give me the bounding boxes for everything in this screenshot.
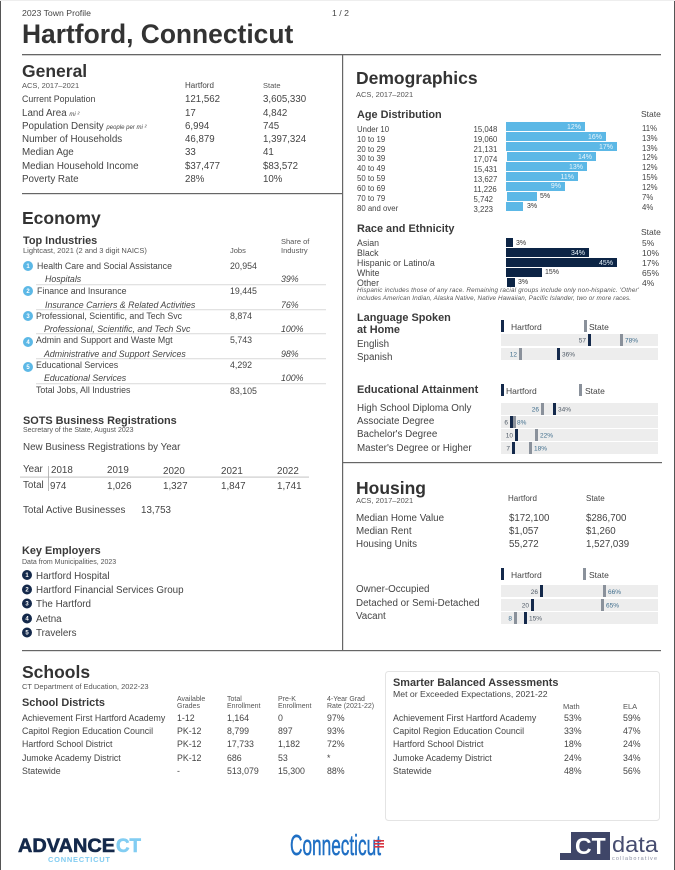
chart: language spoken at home: [357, 312, 658, 363]
chart: race and ethnicity: Other: [357, 278, 379, 288]
table: school districts: 17,733: [227, 739, 254, 749]
list: key employers: [22, 545, 184, 639]
chart: age distribution: 70 to 79: [357, 194, 385, 203]
card: smarter balanced assessments: ELA: [623, 702, 637, 711]
table: SOTS business registrations: 1,026: [107, 481, 132, 492]
list: key employers: Aetna: [36, 614, 62, 625]
panel: housing: [356, 478, 658, 624]
table: school districts: Pre-K: [278, 696, 296, 703]
table: top industries: 3: [26, 314, 30, 320]
table: housing statistics: State: [586, 494, 605, 503]
chart: age distribution: 7%: [642, 193, 653, 202]
chart: age distribution: 13%: [569, 164, 583, 171]
table: school districts: Rate (2021-22): [327, 703, 374, 710]
table: SOTS business registrations: New Business Registrations by Year: [23, 442, 181, 453]
table: SOTS business registrations: Total: [23, 480, 44, 491]
chart: housing occupancy: 26: [531, 589, 538, 596]
table: general statistics: $37,477: [185, 161, 220, 172]
table: SOTS business registrations: 2021: [221, 466, 243, 477]
chart: language spoken at home: State: [589, 322, 609, 332]
chart: age distribution: 60 to 69: [357, 184, 385, 193]
table: general statistics: 17: [185, 108, 196, 119]
logo: CT data collaborative: collaborative: [612, 856, 657, 862]
chart: race and ethnicity: State: [641, 227, 661, 237]
chart: age distribution: 20 to 29: [357, 145, 385, 154]
table: top industries: 5,743: [230, 335, 252, 345]
chart: housing occupancy: Detached or Semi-Detached: [356, 598, 480, 609]
chart: housing occupancy: 8: [508, 616, 512, 622]
chart: race and ethnicity: Black: [357, 248, 379, 258]
chart: housing occupancy: 20: [522, 602, 529, 610]
logo: AdvanceCT: CONNECTICUT: [48, 855, 110, 864]
table: top industries: Share of: [281, 237, 310, 246]
table: school districts: 88%: [327, 766, 345, 776]
list: key employers: 3: [25, 602, 29, 608]
chart: age distribution: 50 to 59: [357, 174, 385, 183]
heading: schools: Schools: [22, 662, 90, 682]
footnote: race and ethnicity: [357, 287, 640, 302]
chart: age distribution: 15,431: [474, 165, 497, 174]
table: SOTS business registrations: [20, 415, 309, 516]
footnote: race and ethnicity: includes American Indian, Alaska Native, Native Hawaiian, Pacific Islander, two or more races.: [357, 295, 631, 302]
table: housing statistics: $172,100: [509, 513, 550, 524]
chart: race and ethnicity: 15%: [545, 269, 559, 276]
table: general statistics: Median Household Income: [22, 161, 139, 172]
table: top industries: Lightcast, 2021 (2 and 3 digit NAICS): [23, 246, 147, 255]
chart: age distribution: 15%: [642, 173, 658, 182]
card: smarter balanced assessments: Statewide: [393, 766, 432, 776]
chart: race and ethnicity: 5%: [642, 238, 655, 248]
card: smarter balanced assessments: Met or Exceeded Expectations, 2021-22: [393, 689, 548, 699]
heading: economy: Economy: [22, 208, 101, 228]
chart: housing occupancy: Owner-Occupied: [356, 584, 430, 595]
chart: age distribution: 3,223: [474, 205, 493, 214]
chart: race and ethnicity: 3%: [518, 279, 528, 286]
table: school districts: 72%: [327, 739, 345, 749]
table: housing statistics: [356, 494, 629, 550]
chart: race and ethnicity: 17%: [642, 258, 659, 268]
table: SOTS business registrations: 2019: [107, 465, 129, 476]
logo: Connecticut: Connecticut: [290, 830, 381, 862]
chart: race and ethnicity: 10%: [642, 248, 659, 258]
table: school districts: 4-Year Grad: [327, 696, 365, 703]
page number: 1 / 2: [332, 8, 349, 18]
heading: housing: Housing: [356, 478, 426, 498]
card: smarter balanced assessments: 34%: [623, 753, 641, 763]
card: smarter balanced assessments: 18%: [564, 739, 582, 749]
chart: age distribution: 3%: [527, 203, 537, 210]
table: top industries: Educational Services: [44, 373, 127, 383]
list: key employers: 2: [25, 588, 29, 594]
table: SOTS business registrations: 2018: [51, 465, 73, 476]
logo: Connecticut: [290, 830, 384, 862]
table: top industries: Health Care and Social Assistance: [37, 261, 172, 271]
list: key employers: Hartford Hospital: [36, 571, 110, 582]
chart: educational attainment: 18%: [534, 446, 547, 452]
table: SOTS business registrations: 2020: [163, 466, 185, 477]
card: smarter balanced assessments: 48%: [564, 766, 582, 776]
table: top industries: Jobs: [230, 246, 246, 255]
chart: age distribution: 16%: [588, 134, 602, 141]
chart: housing occupancy: State: [589, 570, 609, 580]
table: school districts: Total: [227, 696, 242, 703]
chart: age distribution: 13%: [642, 144, 658, 153]
table: general statistics: Median Age: [22, 147, 74, 158]
table: general statistics: [22, 81, 307, 185]
chart: age distribution: 13,627: [474, 175, 497, 184]
table: top industries: 2: [26, 289, 30, 295]
table: general statistics: 121,562: [185, 94, 220, 105]
chart: age distribution: 12%: [567, 124, 581, 131]
heading: general: General: [22, 61, 87, 81]
card: smarter balanced assessments: Math: [563, 702, 580, 711]
chart: language spoken at home: 12: [510, 352, 517, 358]
list: key employers: 1: [25, 573, 29, 579]
table: school districts: PK-12: [177, 753, 202, 763]
table: top industries: Professional, Scientific, and Tech Svc: [36, 311, 183, 321]
logo: CT data collaborative: [560, 832, 659, 862]
chart: age distribution: 11,226: [474, 185, 497, 194]
table: top industries: 83,105: [230, 386, 257, 396]
table: general statistics: $83,572: [263, 161, 298, 172]
chart: race and ethnicity: White: [357, 268, 380, 278]
chart: age distribution: 80 and over: [357, 204, 399, 213]
table: SOTS business registrations: Secretary of the State, August 2023: [23, 427, 134, 434]
title: Hartford, Connecticut: [22, 19, 293, 49]
source: schools: CT Department of Education, 2022-23: [22, 682, 149, 691]
table: general statistics: 6,994: [185, 121, 210, 132]
chart: educational attainment: Educational Attainment: [357, 384, 479, 396]
card: smarter balanced assessments: 47%: [623, 726, 641, 736]
panel: demographics: [356, 68, 661, 454]
table: SOTS business registrations: Total Active Businesses: [23, 505, 125, 516]
card: smarter balanced assessments: [386, 672, 660, 820]
table: housing statistics: $1,057: [509, 526, 539, 537]
table: SOTS business registrations: 13,753: [141, 505, 172, 516]
chart: educational attainment: Hartford: [506, 386, 537, 396]
chart: language spoken at home: Spanish: [357, 352, 392, 363]
table: general statistics: Number of Households: [22, 134, 122, 145]
table: school districts: 97%: [327, 713, 345, 723]
table: top industries: 19,445: [230, 286, 257, 296]
table: school districts: Enrollment: [227, 703, 261, 710]
table: SOTS business registrations: 974: [50, 481, 67, 492]
chart: age distribution: 30 to 39: [357, 154, 385, 163]
table: top industries: 4: [26, 340, 30, 346]
logo: AdvanceCT: ADVANCE: [18, 835, 115, 857]
table: general statistics: 46,879: [185, 134, 215, 145]
card: smarter balanced assessments: 24%: [564, 753, 582, 763]
table: school districts: 0: [278, 713, 283, 723]
header: [22, 8, 349, 49]
chart: age distribution: 15,048: [474, 125, 497, 134]
chart: race and ethnicity: 4%: [642, 278, 655, 288]
table: top industries: Admin and Support and Waste Mgt: [36, 335, 173, 345]
report label: 2023 Town Profile: [22, 8, 91, 18]
table: school districts: Enrollment: [278, 703, 312, 710]
table: SOTS business registrations: 1,847: [221, 481, 246, 492]
logo: CT data collaborative: CT: [575, 833, 606, 859]
table: general statistics: Hartford: [185, 81, 214, 90]
chart: housing occupancy: 65%: [606, 602, 619, 610]
logo: CT data collaborative: data: [612, 832, 659, 857]
table: SOTS business registrations: SOTS Business Registrations: [23, 415, 177, 427]
chart: educational attainment: State: [585, 386, 605, 396]
chart: age distribution: State: [641, 109, 661, 119]
table: school districts: Grades: [177, 703, 200, 710]
chart: language spoken at home: 57: [579, 338, 586, 344]
chart: race and ethnicity: Asian: [357, 238, 379, 248]
chart: age distribution: 5%: [540, 193, 550, 200]
card: smarter balanced assessments: Capitol Region Education Council: [393, 726, 524, 736]
table: top industries: Hospitals: [45, 274, 82, 284]
chart: age distribution: 17,074: [474, 155, 498, 164]
table: school districts: PK-12: [177, 726, 202, 736]
table: school districts: Available: [177, 696, 205, 703]
logo: AdvanceCT: [18, 835, 141, 864]
table: school districts: Capitol Region Education Council: [22, 726, 153, 736]
chart: housing occupancy: Vacant: [356, 611, 386, 622]
table: housing statistics: Housing Units: [356, 539, 417, 550]
table: general statistics: State: [263, 81, 281, 90]
table: top industries: Finance and Insurance: [37, 286, 127, 296]
table: housing statistics: 55,272: [509, 539, 539, 550]
table: SOTS business registrations: 1,741: [277, 481, 302, 492]
chart: language spoken at home: at Home: [357, 324, 400, 336]
table: top industries: 98%: [281, 349, 299, 359]
table: top industries: Top Industries: [23, 235, 97, 247]
chart: age distribution: 12%: [642, 183, 658, 192]
table: school districts: PK-12: [177, 739, 202, 749]
table: housing statistics: $286,700: [586, 513, 627, 524]
chart: age distribution: 13%: [642, 134, 658, 143]
table: top industries: Educational Services: [36, 360, 119, 370]
chart: race and ethnicity: [357, 223, 661, 288]
card: smarter balanced assessments: 24%: [623, 739, 641, 749]
card: smarter balanced assessments: Smarter Balanced Assessments: [393, 677, 558, 689]
chart: educational attainment: 6: [504, 420, 508, 426]
source: demographics: ACS, 2017–2021: [356, 90, 413, 99]
chart: educational attainment: [357, 384, 658, 454]
chart: race and ethnicity: Race and Ethnicity: [357, 223, 454, 235]
list: key employers: Data from Municipalities, 2023: [22, 559, 116, 566]
panel: general: [22, 61, 307, 185]
table: top industries: 100%: [281, 373, 304, 383]
chart: housing occupancy: Hartford: [511, 570, 542, 580]
list: key employers: Travelers: [36, 628, 77, 639]
table: general statistics: 745: [263, 121, 279, 132]
chart: age distribution: 12%: [642, 163, 658, 172]
chart: age distribution: 12%: [642, 153, 658, 162]
table: general statistics: 1,397,324: [263, 134, 307, 145]
table: top industries: 20,954: [230, 261, 257, 271]
chart: race and ethnicity: 65%: [642, 268, 659, 278]
table: general statistics: Poverty Rate: [22, 174, 79, 185]
table: general statistics: 33: [185, 147, 196, 158]
table: school districts: -: [177, 766, 180, 776]
table: school districts: Jumoke Academy District: [22, 753, 121, 763]
table: school districts: 93%: [327, 726, 345, 736]
table: top industries: 1: [26, 264, 30, 270]
table: housing statistics: $1,260: [586, 526, 616, 537]
table: top industries: 100%: [281, 324, 304, 334]
chart: age distribution: 9%: [551, 183, 561, 190]
table: school districts: 1,182: [278, 739, 300, 749]
chart: language spoken at home: English: [357, 339, 389, 350]
table: school districts: Statewide: [22, 766, 61, 776]
table: school districts: 1,164: [227, 713, 249, 723]
table: housing statistics: Median Home Value: [356, 513, 445, 524]
chart: race and ethnicity: 3%: [516, 240, 526, 247]
chart: age distribution: 11%: [642, 124, 657, 133]
chart: educational attainment: 10: [506, 432, 513, 440]
table: school districts: 8,799: [227, 726, 249, 736]
footnote: race and ethnicity: Hispanic includes those of any race. Remaining racial groups include only non-hispanic. 'Other': [357, 287, 640, 294]
chart: educational attainment: 34%: [558, 406, 571, 414]
chart: race and ethnicity: Hispanic or Latino/a: [357, 258, 435, 268]
chart: age distribution: 5,742: [474, 195, 493, 204]
card: smarter balanced assessments: Achievement First Hartford Academy: [393, 713, 537, 723]
chart: educational attainment: High School Diploma Only: [357, 403, 471, 414]
chart: race and ethnicity: 45%: [599, 260, 613, 267]
chart: language spoken at home: Hartford: [511, 322, 542, 332]
table: school districts: *: [327, 753, 331, 763]
card: smarter balanced assessments: 33%: [564, 726, 582, 736]
table: SOTS business registrations: Year: [23, 464, 44, 475]
chart: age distribution: 10 to 19: [357, 135, 385, 144]
panel: schools: [22, 662, 660, 820]
card: smarter balanced assessments: 59%: [623, 713, 641, 723]
card: smarter balanced assessments: Hartford School District: [393, 739, 484, 749]
card: smarter balanced assessments: Jumoke Academy District: [393, 753, 492, 763]
chart: educational attainment: Bachelor's Degree: [357, 429, 438, 440]
table: housing statistics: Median Rent: [356, 526, 412, 537]
chart: age distribution: 21,131: [474, 145, 497, 154]
source: housing: ACS, 2017–2021: [356, 496, 413, 505]
panel: economy: [20, 208, 326, 639]
table: school districts: [22, 696, 374, 776]
heading: demographics: Demographics: [356, 68, 478, 88]
table: housing statistics: 1,527,039: [586, 539, 629, 550]
table: school districts: 53: [278, 753, 288, 763]
chart: age distribution: 14%: [578, 154, 592, 161]
card: smarter balanced assessments: 53%: [564, 713, 582, 723]
chart: language spoken at home: 78%: [625, 338, 638, 344]
table: school districts: 686: [227, 753, 242, 763]
chart: educational attainment: 22%: [540, 432, 553, 440]
table: SOTS business registrations: 2022: [277, 466, 299, 477]
table: top industries: 4,292: [230, 360, 252, 370]
table: school districts: 897: [278, 726, 293, 736]
list: key employers: 5: [25, 630, 29, 636]
table: school districts: School Districts: [22, 697, 105, 709]
chart: language spoken at home: 36%: [562, 352, 575, 358]
chart: age distribution: 19,060: [474, 135, 498, 144]
chart: age distribution: 11%: [560, 174, 574, 181]
table: top industries: 8,874: [230, 311, 252, 321]
chart: educational attainment: Associate Degree: [357, 416, 435, 427]
table: general statistics: 41: [263, 147, 274, 158]
logo: AdvanceCT: CT: [116, 835, 141, 857]
chart: educational attainment: 8%: [517, 420, 527, 426]
list: key employers: Key Employers: [22, 545, 101, 557]
chart: educational attainment: 26: [532, 406, 539, 414]
chart: educational attainment: Master's Degree or Higher: [357, 443, 472, 454]
chart: educational attainment: 7: [506, 446, 510, 452]
chart: age distribution: Under 10: [357, 125, 390, 134]
table: general statistics: 28%: [185, 174, 205, 185]
table: housing statistics: Hartford: [508, 494, 537, 503]
chart: age distribution: 17%: [599, 144, 613, 151]
table: top industries: Insurance Carriers & Related Activities: [45, 300, 196, 310]
list: key employers: Hartford Financial Services Group: [36, 585, 184, 596]
table: top industries: 76%: [281, 300, 299, 310]
table: top industries: 39%: [281, 274, 299, 284]
list: key employers: The Hartford: [36, 599, 91, 610]
table: top industries: Administrative and Support Services: [43, 349, 186, 359]
chart: age distribution: [357, 109, 661, 214]
table: general statistics: 4,842: [263, 108, 287, 119]
chart: age distribution: 40 to 49: [357, 164, 385, 173]
table: top industries: [23, 235, 326, 396]
table: top industries: Total Jobs, All Industries: [36, 385, 131, 395]
table: general statistics: 10%: [263, 174, 283, 185]
table: school districts: 513,079: [227, 766, 259, 776]
table: top industries: Professional, Scientific, and Tech Svc: [44, 324, 191, 334]
table: school districts: Hartford School District: [22, 739, 113, 749]
list: key employers: 4: [25, 616, 29, 622]
chart: housing occupancy: 15%: [529, 616, 542, 622]
chart: age distribution: 4%: [642, 203, 653, 212]
table: top industries: 5: [26, 365, 30, 371]
table: general statistics: Land Area mi ²: [22, 108, 80, 119]
chart: language spoken at home: Language Spoken: [357, 312, 451, 324]
table: general statistics: Population Density people per mi ²: [22, 121, 147, 132]
table: general statistics: Current Population: [22, 94, 95, 104]
table: SOTS business registrations: 1,327: [163, 481, 188, 492]
card: smarter balanced assessments: 56%: [623, 766, 641, 776]
table: top industries: Industry: [281, 246, 308, 255]
table: school districts: 1-12: [177, 713, 195, 723]
chart: housing occupancy: [356, 568, 658, 624]
source: general: ACS, 2017–2021: [22, 81, 79, 90]
chart: age distribution: Age Distribution: [357, 109, 442, 121]
table: general statistics: 3,605,330: [263, 94, 307, 105]
table: school districts: 15,300: [278, 766, 305, 776]
chart: race and ethnicity: 34%: [571, 250, 585, 257]
table: school districts: Achievement First Hartford Academy: [22, 713, 166, 723]
chart: housing occupancy: 66%: [608, 589, 621, 596]
